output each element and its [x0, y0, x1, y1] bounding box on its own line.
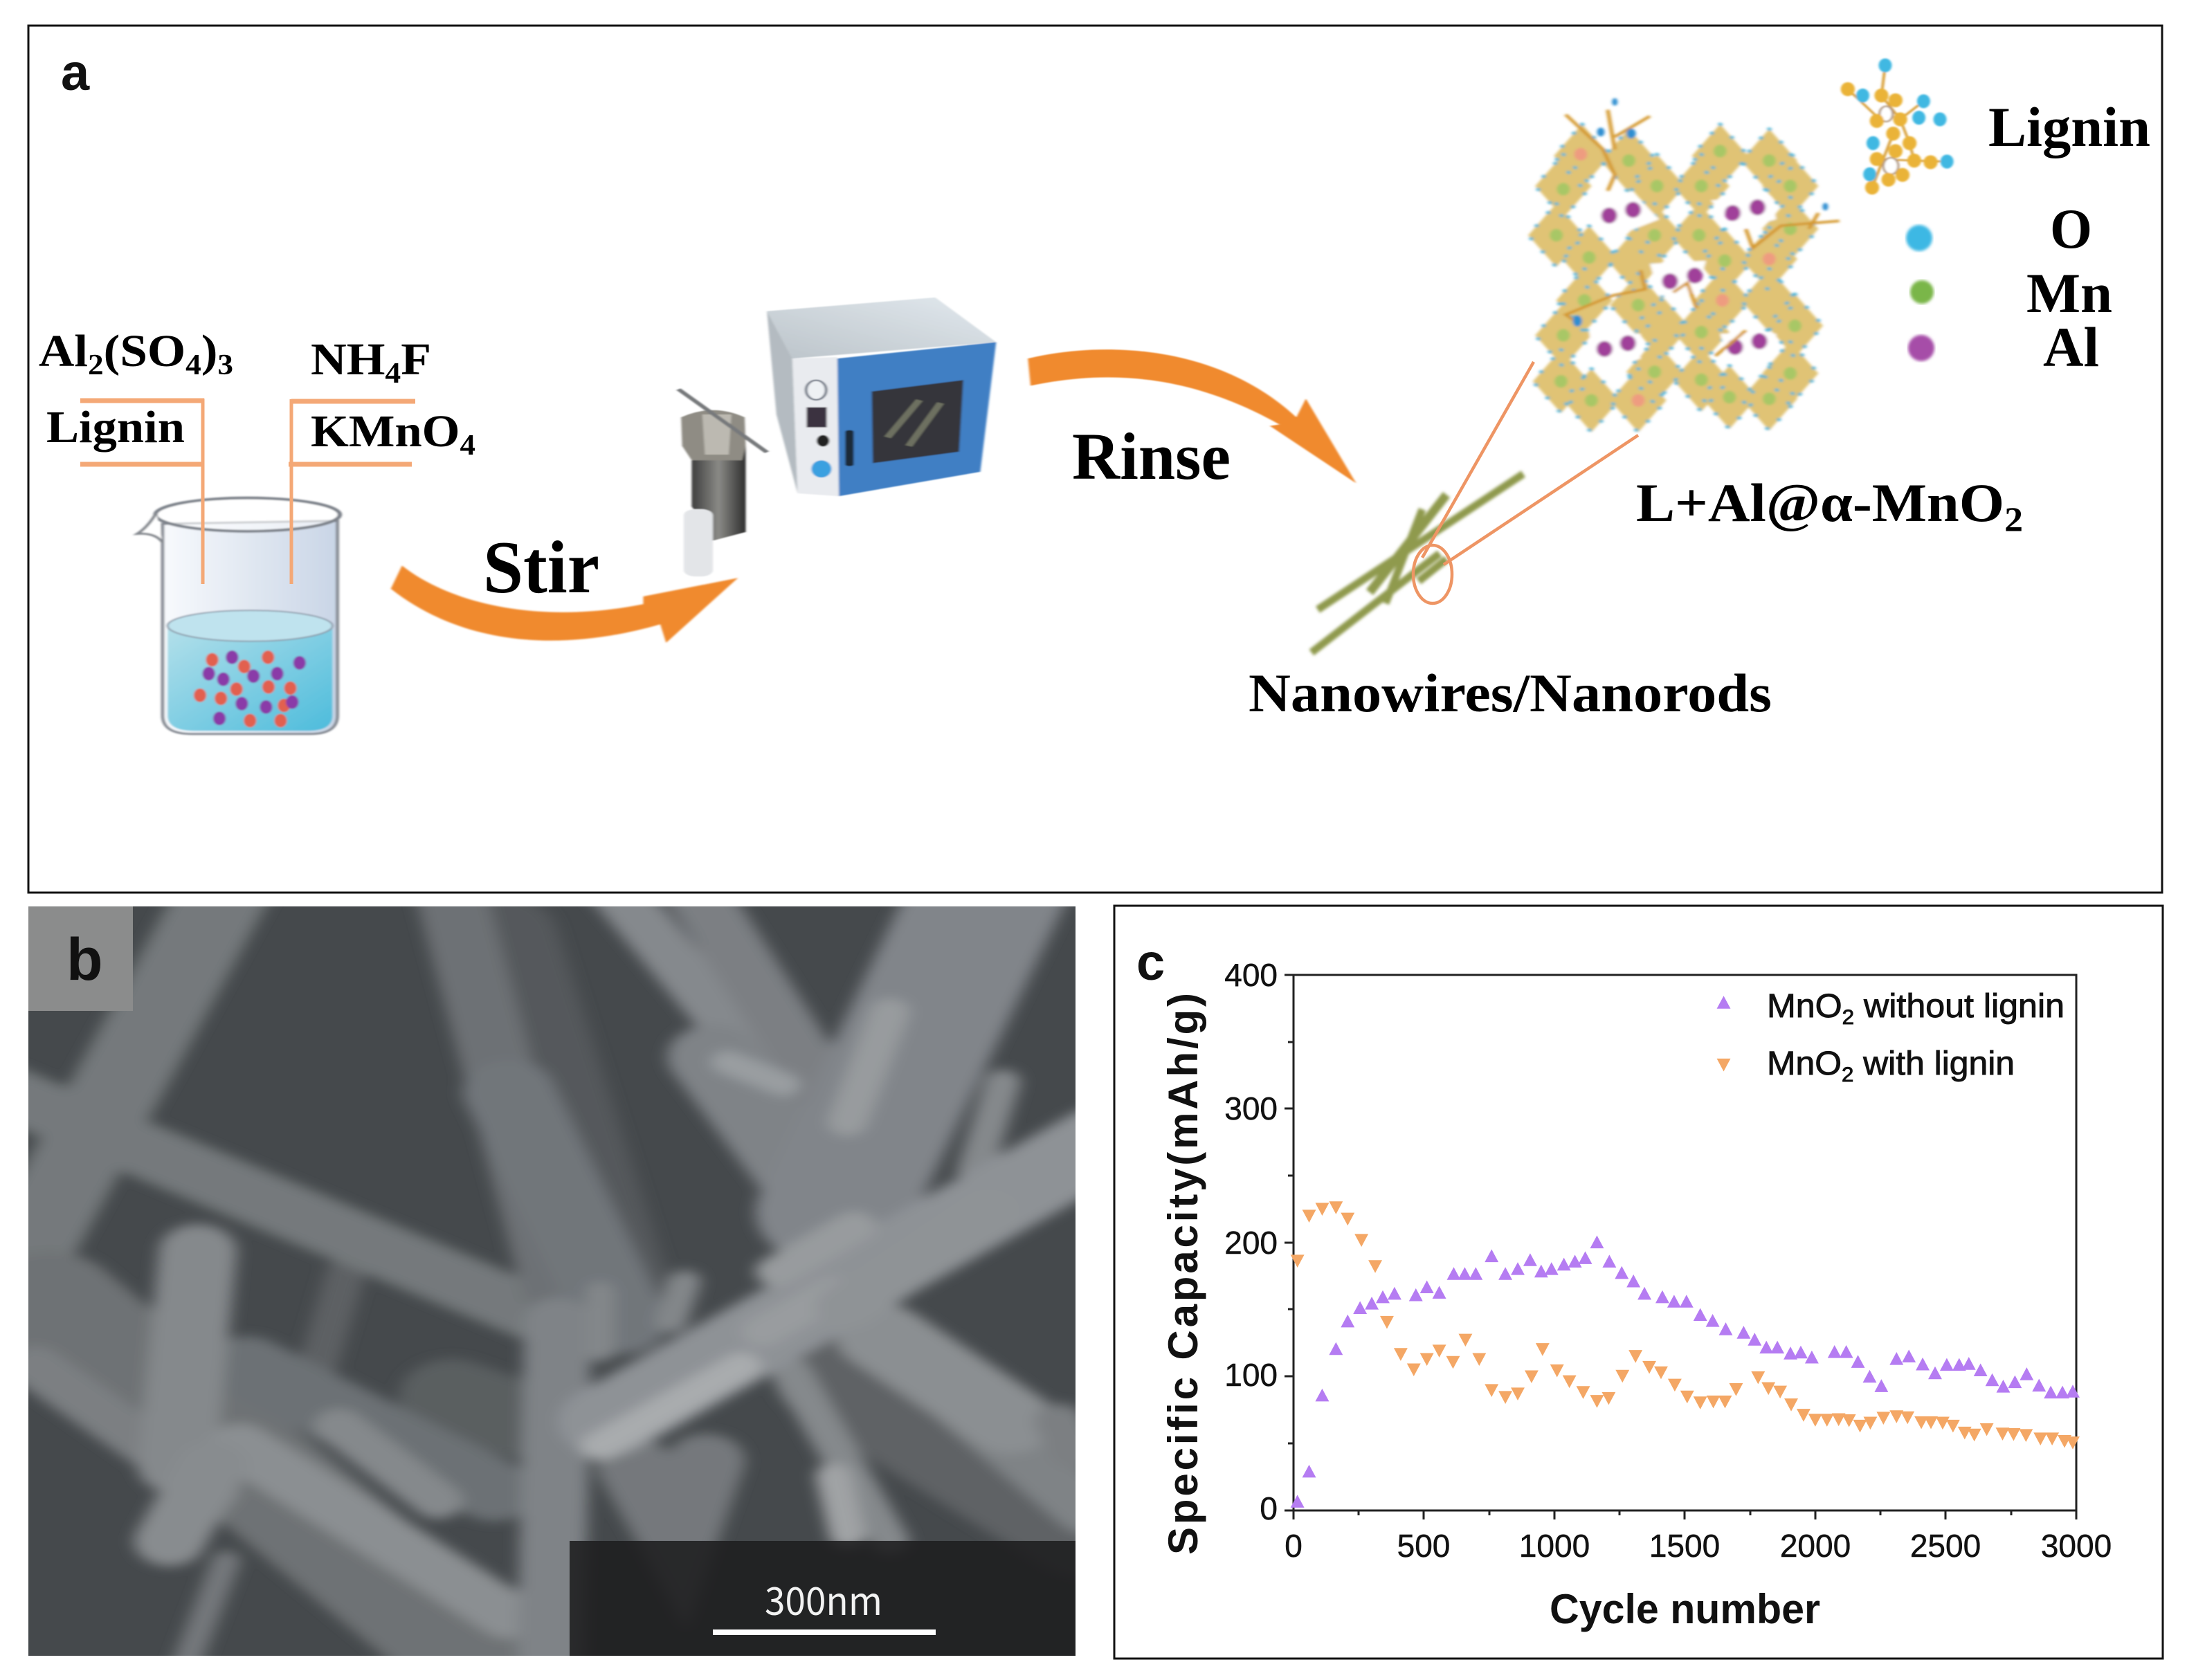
reagent label: KMnO4: 4	[460, 430, 475, 462]
panel a label: a	[61, 44, 90, 101]
reagent label: KMnO4: KMnO	[311, 406, 451, 457]
legend text: with lignin: MnO	[1767, 1046, 1839, 1082]
panel b: SEM micrograph	[0, 863, 1130, 1680]
x axis tick labels: 3000	[2041, 1528, 2112, 1564]
reagent label: Al2(SO4)3: (SO	[104, 326, 185, 376]
arrow: stir	[391, 565, 738, 643]
legend dot: Al	[1908, 335, 1934, 361]
label: Stir: Stir	[483, 527, 599, 609]
crystal structure: L+Al@alpha-MnO2	[1528, 98, 1840, 432]
y axis tick labels: 0	[1260, 1490, 1278, 1526]
panel b label box	[28, 906, 133, 1011]
axes and ticks	[1285, 975, 2076, 1519]
legend text: without lignin: without lignin	[1854, 988, 2065, 1025]
reagent label: NH4F: 4	[385, 358, 401, 390]
legend label: Al: Al	[2043, 316, 2099, 378]
x axis tick labels: 0	[1285, 1528, 1303, 1564]
y axis tick labels: 200	[1224, 1225, 1278, 1261]
SEM image of nanorods	[28, 906, 1076, 1656]
zoom callout lines and ellipse	[1413, 362, 1638, 603]
x axis tick labels: 1500	[1649, 1528, 1720, 1564]
y axis title: Specific Capacity(mAh/g)	[1160, 993, 1206, 1555]
label: L+Al@alpha-MnO2: L+Al@α-MnO	[1636, 473, 1978, 533]
label: Rinse: Rinse	[1072, 419, 1231, 493]
y axis tick labels	[1224, 957, 1278, 1526]
label: Nanowires/Nanorods: Nanowires/Nanorods	[1249, 663, 1772, 723]
legend dot: O	[1906, 225, 1932, 251]
reagent label: Lignin: Lignin	[46, 402, 185, 453]
icon: beaker with solution	[138, 498, 340, 734]
y axis tick labels: 400	[1224, 957, 1278, 993]
reagent label: Al2(SO4)3: 4	[185, 349, 201, 381]
y axis tick labels: 100	[1224, 1357, 1278, 1393]
scale bar	[713, 1629, 936, 1635]
x axis tick labels: 2500	[1910, 1528, 1981, 1564]
panel c label: c	[1136, 933, 1165, 991]
label: L+Al@alpha-MnO2: 2	[2004, 500, 2023, 538]
icon: autoclave	[678, 389, 767, 576]
data series: MnO2 with lignin	[1291, 1201, 2080, 1450]
icon: lignin molecule	[1841, 58, 1954, 194]
data series: MnO2 without lignin	[1291, 1236, 2080, 1508]
reagent label: NH4F: F	[401, 334, 431, 385]
legend text: with lignin: with lignin	[1853, 1046, 2015, 1082]
reagent label: NH4F: NH	[311, 334, 379, 385]
icon: nanowire bundle	[1312, 474, 1523, 652]
legend text: without lignin: MnO	[1767, 988, 1839, 1025]
x axis tick labels	[1285, 1528, 2112, 1564]
scale bar backdrop	[570, 1541, 1076, 1656]
legend marker: with lignin	[1717, 1059, 1730, 1071]
legend marker: without lignin	[1717, 996, 1730, 1009]
panel a: synthesis schematic	[28, 26, 2162, 893]
scale bar label: 300nm	[765, 1571, 882, 1627]
reagent label: Al2(SO4)3: Al	[39, 326, 84, 376]
x axis tick labels: 1000	[1519, 1528, 1590, 1564]
legend label: Mn: Mn	[2026, 262, 2112, 325]
legend dot: Mn	[1910, 280, 1934, 304]
x axis title: Cycle number	[1550, 1586, 1820, 1632]
arrow: rinse	[1028, 349, 1356, 483]
panel c: cycling chart	[1114, 906, 2163, 1659]
reagent label: Al2(SO4)3: 2	[88, 349, 104, 381]
reagent label: Al2(SO4)3: )	[201, 326, 217, 376]
x axis tick labels: 2000	[1780, 1528, 1851, 1564]
reagent label: Al2(SO4)3: 3	[217, 349, 233, 381]
legend label: O: O	[2050, 197, 2092, 260]
reagent feed lines	[80, 399, 415, 584]
x axis tick labels: 500	[1397, 1528, 1450, 1564]
icon: drying oven	[767, 298, 996, 496]
legend: lignin: Lignin	[1988, 95, 2150, 158]
y axis tick labels: 300	[1224, 1090, 1278, 1126]
legend text: with lignin: 2	[1842, 1063, 1853, 1086]
legend text: without lignin: 2	[1842, 1006, 1854, 1029]
panel b label: b	[66, 926, 103, 993]
